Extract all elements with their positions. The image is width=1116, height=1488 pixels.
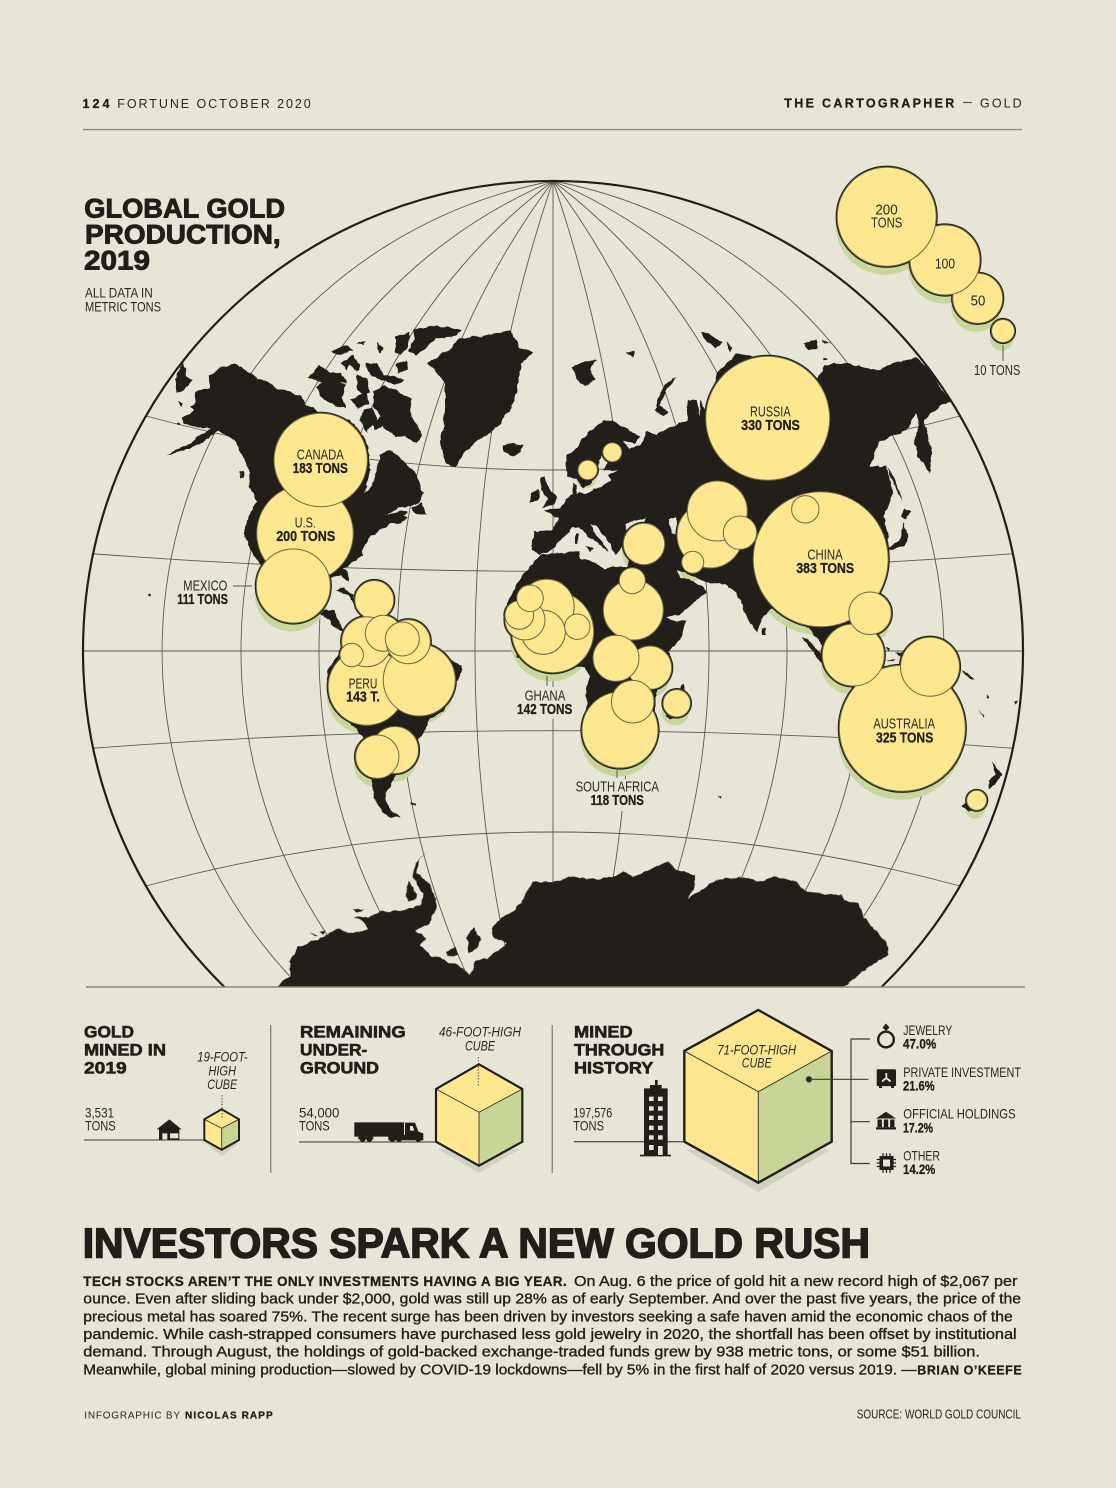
cube height label: HIGH: [208, 1062, 237, 1078]
panel heading: UNDER-: [300, 1041, 367, 1060]
map country labels: AUSTRALIA: [873, 717, 935, 733]
breakdown: other: 14.2%: [903, 1161, 936, 1177]
map globe outline: [83, 181, 1023, 987]
bubbles: Europe and Africa: [505, 443, 690, 768]
breakdown: official holdings: 17.2%: [903, 1119, 933, 1135]
tons value: [573, 1104, 612, 1134]
cube height label: [717, 1041, 797, 1071]
breakdown: jewelry: [878, 1022, 953, 1052]
medium cube: [436, 1057, 522, 1173]
credits: INFOGRAPHIC BY: [84, 1410, 180, 1421]
tons value: TONS: [85, 1118, 116, 1134]
source: SOURCE: WORLD GOLD COUNCIL: [857, 1407, 1021, 1421]
credits: NICOLAS RAPP: [185, 1410, 273, 1421]
icon: ring: [878, 1024, 894, 1047]
tons value: 3,531: [85, 1104, 114, 1120]
world map graticule: [84, 182, 1022, 978]
article body text: TECH STOCKS AREN’T THE ONLY INVESTMENTS HAVING A BIG YEAR.: [83, 1274, 567, 1289]
breakdown: official holdings: [876, 1106, 1016, 1135]
icon: building: [640, 1080, 671, 1156]
cube height label: 71-FOOT-HIGH: [717, 1041, 797, 1057]
map country labels: CHINA: [807, 547, 843, 563]
bubbles: Asia and Oceania: [677, 356, 987, 810]
panel heading: REMAINING: [300, 1023, 406, 1042]
map country labels: 325 TONS: [876, 730, 934, 746]
tons value: [85, 1104, 116, 1134]
map country labels: 383 TONS: [796, 561, 854, 577]
breakdown: private investment: [877, 1064, 1021, 1094]
page header: [82, 96, 1022, 130]
legend: bubble size key: 100: [935, 256, 955, 272]
cube height label: [439, 1024, 522, 1053]
map country labels: 330 TONS: [741, 418, 800, 434]
panel heading: 2019: [84, 1058, 127, 1077]
map bottom rule: [86, 986, 1025, 988]
panel heading: MINED: [574, 1023, 633, 1042]
panel heading: [300, 1023, 406, 1077]
map country labels: MEXICO: [183, 579, 227, 595]
page header: 124: [82, 97, 110, 111]
map subtitle: [85, 284, 161, 315]
article headline: INVESTORS SPARK A NEW GOLD RUSH: [83, 1219, 870, 1266]
callout bracket: [806, 1039, 870, 1164]
icon: safe: [877, 1069, 896, 1088]
panel heading: HISTORY: [574, 1058, 654, 1077]
map land: Europe, Asia and Africa: [505, 332, 1018, 812]
map land: Antarctica: [276, 852, 888, 988]
page header: THE CARTOGRAPHER: [784, 96, 954, 110]
article body text: On Aug. 6 the price of gold hit a new record high of $2,067 per: [574, 1274, 1017, 1290]
map country labels: 143 T.: [346, 690, 380, 706]
page header: GOLD: [980, 96, 1022, 110]
panel heading: GROUND: [300, 1058, 379, 1077]
cube height label: 46-FOOT-HIGH: [439, 1024, 522, 1040]
cube height label: CUBE: [742, 1055, 772, 1071]
article body text: ounce. Even after sliding back under $2,000, gold was still up 28% as of early September. And over the past five years, the price of the: [83, 1292, 1021, 1308]
breakdown: private investment: PRIVATE INVESTMENT: [903, 1064, 1021, 1080]
map country labels: CANADA: [297, 447, 344, 463]
bubble outlines: [256, 167, 1014, 810]
map land: Americas and Greenland: [148, 325, 533, 818]
map land masses: [148, 325, 1018, 988]
large cube: [684, 1010, 832, 1192]
credits: [84, 1410, 273, 1421]
icon: bank: [876, 1112, 896, 1130]
map country labels: RUSSIA: [750, 405, 791, 421]
article body text: [83, 1274, 1022, 1378]
panel: gold mined in 2019: [84, 1023, 248, 1156]
panel: mined through history: [573, 1010, 1021, 1192]
article body text: precious metal has soared 75%. The recent surge has been driven by investors seeking a safe haven amid the economic chaos of the: [83, 1309, 1013, 1325]
map country labels: 200 TONS: [276, 529, 335, 545]
cube height label: CUBE: [465, 1037, 496, 1053]
legend: bubble size key: 50: [971, 294, 985, 310]
breakdown: other: OTHER: [903, 1147, 940, 1163]
panel heading: THROUGH: [574, 1041, 664, 1060]
breakdown: private investment: 21.6%: [903, 1078, 935, 1094]
panel heading: [84, 1023, 166, 1077]
icon: truck: [354, 1122, 423, 1142]
article body text: BRIAN O’KEEFE: [917, 1363, 1022, 1377]
article body text: demand. Through August, the holdings of gold-backed exchange-traded funds grew by 938 metric tons, or some $51 billion.: [83, 1345, 980, 1361]
icon: chip: [877, 1153, 896, 1173]
small cube: [204, 1095, 239, 1156]
map title: GLOBAL GOLD: [84, 194, 285, 224]
map title: [84, 194, 285, 275]
cube height label: CUBE: [207, 1076, 238, 1092]
map country labels: SOUTH AFRICA: [576, 780, 659, 796]
panel heading: [574, 1023, 664, 1077]
breakdown: other: [877, 1147, 940, 1177]
map country labels: [177, 405, 935, 809]
map country labels: 142 TONS: [517, 702, 573, 718]
map country labels: PERU: [349, 676, 377, 692]
cover below the map: [60, 987, 1060, 999]
map country labels: GHANA: [525, 689, 566, 705]
page header: FORTUNE OCTOBER 2020: [117, 97, 311, 111]
legend: bubble size key: 200: [875, 202, 898, 218]
cube height label: [197, 1049, 248, 1092]
breakdown: official holdings: OFFICIAL HOLDINGS: [903, 1106, 1016, 1122]
map country labels: 118 TONS: [591, 793, 644, 809]
map title: 2019: [84, 245, 150, 275]
tons value: TONS: [299, 1118, 330, 1134]
map country labels: 183 TONS: [293, 461, 348, 477]
tons value: 54,000: [299, 1104, 339, 1120]
breakdown: jewelry: JEWELRY: [903, 1022, 953, 1038]
bubble shadows: [255, 176, 1013, 819]
bubbles: Americas: [256, 413, 455, 778]
article body text: pandemic. While cash-strapped consumers have purchased less gold jewelry in 2020, the shortfall has been offset by institutional: [83, 1327, 1017, 1343]
panel heading: GOLD: [84, 1023, 134, 1042]
article body text: Meanwhile, global mining production—slowed by COVID-19 lockdowns—fell by 5% in the first half of 2020 versus 2019. —: [83, 1362, 917, 1378]
legend: bubble size key: 10 TONS: [974, 363, 1020, 379]
tons value: TONS: [573, 1118, 604, 1134]
tons value: [299, 1104, 339, 1134]
legend: bubble size key: TONS: [871, 216, 902, 232]
map title: PRODUCTION,: [85, 219, 281, 249]
cube height label: 19-FOOT-: [197, 1049, 248, 1065]
map subtitle: ALL DATA IN: [85, 284, 153, 300]
panel heading: MINED IN: [84, 1041, 166, 1060]
tons value: 197,576: [573, 1104, 612, 1120]
map country labels: U.S.: [295, 515, 316, 531]
map subtitle: METRIC TONS: [85, 299, 161, 315]
breakdown: jewelry: 47.0%: [903, 1036, 937, 1052]
icon: house: [157, 1119, 182, 1140]
label knockouts: [515, 687, 661, 811]
panel: remaining underground: [299, 1023, 522, 1173]
map country labels: 111 TONS: [177, 592, 228, 608]
legend: bubble size key: [837, 167, 1020, 379]
